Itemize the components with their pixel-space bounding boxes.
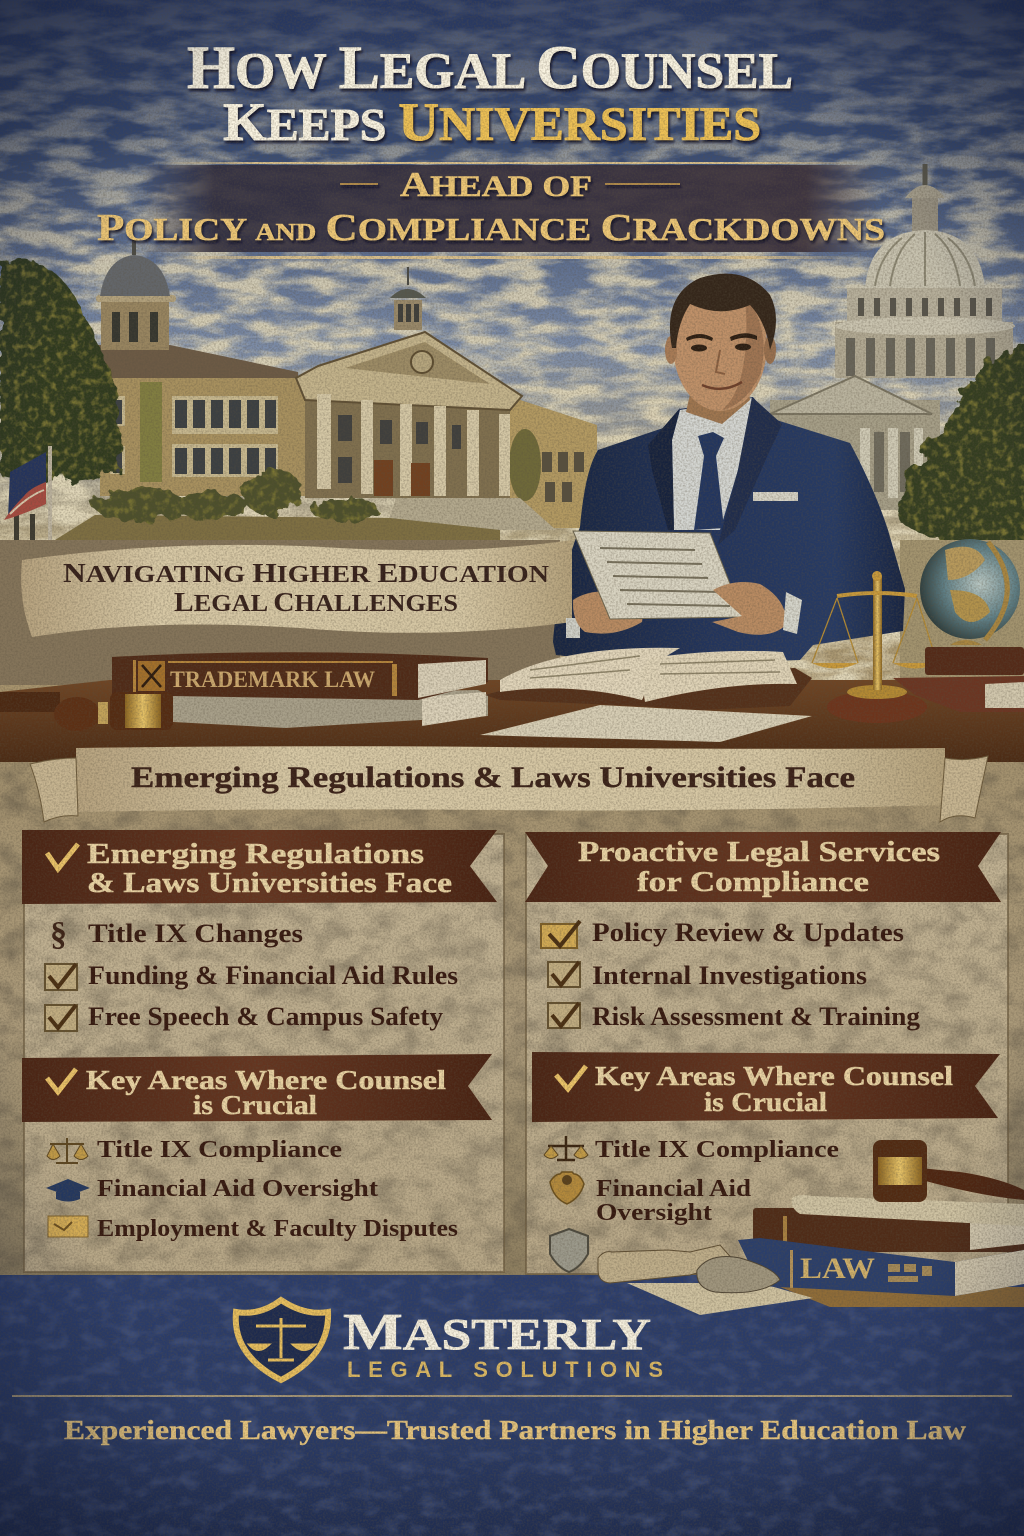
scroll and cloth xyxy=(598,1245,735,1283)
right hand xyxy=(712,582,786,635)
face xyxy=(673,279,767,411)
left list two: Employment & Faculty Disputes xyxy=(97,1216,458,1242)
right list one: Risk Assessment & Training xyxy=(592,1002,920,1031)
left list one xyxy=(45,916,458,1031)
right ribbon: proactive services: for Compliance xyxy=(637,866,869,898)
cream book xyxy=(792,1195,1024,1226)
subtitle xyxy=(97,165,885,249)
main hall roof and wall xyxy=(73,345,298,395)
neck xyxy=(686,385,750,424)
right panel xyxy=(525,832,1008,1274)
left ribbon: key areas: is Crucial xyxy=(193,1090,318,1120)
title: KEEPS UNIVERSITIES xyxy=(223,92,761,152)
portico xyxy=(296,267,522,498)
right wing xyxy=(505,395,597,528)
left list one: Title IX Changes xyxy=(88,919,303,948)
left ribbon: emerging regulations xyxy=(22,830,497,904)
ground haze xyxy=(0,540,1024,685)
left panel xyxy=(22,830,504,1272)
suit xyxy=(553,397,905,665)
right tree xyxy=(898,345,1024,549)
trees xyxy=(0,260,1024,549)
title xyxy=(187,35,793,152)
left list two: Title IX Compliance xyxy=(97,1137,342,1163)
title: HOW LEGAL COUNSEL xyxy=(187,35,793,102)
right ribbon: proactive services xyxy=(525,832,1001,902)
open book xyxy=(480,648,812,742)
book: trademark law xyxy=(112,652,488,728)
desk xyxy=(0,680,1024,764)
section banner: Emerging Regulations & Laws Universities Face xyxy=(131,761,855,794)
gavel left xyxy=(0,692,173,731)
footer divider xyxy=(12,1395,1012,1397)
wood shelf xyxy=(780,1287,1024,1307)
left list one: Free Speech & Campus Safety xyxy=(88,1002,443,1031)
footer band xyxy=(0,1275,1024,1536)
title panel xyxy=(97,35,885,259)
left list one: § xyxy=(50,916,67,953)
steps and lawn xyxy=(385,498,556,530)
right ribbon: key areas: Key Areas Where Counsel xyxy=(595,1061,954,1091)
right list one: Policy Review & Updates xyxy=(592,918,904,947)
navigating banner: NAVIGATING HIGHER EDUCATION xyxy=(63,558,550,588)
right list two: Oversight xyxy=(596,1200,712,1226)
section banner xyxy=(30,746,988,822)
brown book xyxy=(753,1208,1024,1252)
left list two: Financial Aid Oversight xyxy=(97,1176,378,1202)
left cuff and hand xyxy=(566,618,580,638)
subtitle: AHEAD OF xyxy=(400,165,592,204)
logo: shield xyxy=(236,1300,328,1380)
right list one: Internal Investigations xyxy=(592,961,867,990)
background: sky scene xyxy=(0,0,1024,692)
loose paper xyxy=(627,1283,813,1315)
university building xyxy=(55,240,597,542)
logo wordmark xyxy=(343,1304,663,1382)
lawyer figure xyxy=(553,274,905,665)
right list one xyxy=(541,918,920,1031)
left ribbon: key areas xyxy=(22,1054,492,1122)
lapels xyxy=(648,408,680,530)
shirt xyxy=(672,398,752,530)
subtitle: POLICY AND COMPLIANCE CRACKDOWNS xyxy=(97,207,885,249)
right ribbon: proactive services: Proactive Legal Services xyxy=(578,836,940,868)
blue book xyxy=(738,1238,1024,1296)
navigating banner: LEGAL CHALLENGES xyxy=(174,587,458,617)
tagline: Experienced Lawyers—Trusted Partners in Higher Education Law xyxy=(64,1415,967,1445)
right ribbon: key areas: is Crucial xyxy=(704,1087,828,1117)
law books and gavel xyxy=(598,1140,1024,1315)
capitol dome xyxy=(770,164,1015,510)
left list two xyxy=(46,1137,458,1242)
left tree xyxy=(0,260,121,481)
left ribbon: emerging regulations: & Laws Universities Face xyxy=(87,867,452,899)
logo wordmark: MASTERLY xyxy=(343,1304,651,1361)
law books and gavel: LAW xyxy=(800,1252,875,1285)
right ribbon: key areas xyxy=(532,1052,1000,1122)
right list two xyxy=(544,1136,839,1272)
dome: left cupola xyxy=(96,240,176,350)
parchment section xyxy=(0,762,1024,1278)
flag xyxy=(4,446,52,554)
logo wordmark: LEGAL SOLUTIONS xyxy=(347,1357,663,1382)
hair xyxy=(670,274,776,350)
left ribbon: emerging regulations: Emerging Regulations xyxy=(87,838,424,870)
left list one: Funding & Financial Aid Rules xyxy=(88,961,458,990)
document held xyxy=(566,531,802,638)
book: trademark law: TRADEMARK LAW xyxy=(170,667,375,692)
right list two: Financial Aid xyxy=(596,1176,752,1202)
scales of justice xyxy=(812,571,937,723)
right list two: Title IX Compliance xyxy=(595,1137,839,1163)
gavel xyxy=(920,1168,1024,1200)
globe and books xyxy=(893,539,1024,712)
tie xyxy=(694,432,724,530)
navigating banner xyxy=(21,540,572,637)
left ribbon: key areas: Key Areas Where Counsel xyxy=(86,1065,447,1095)
